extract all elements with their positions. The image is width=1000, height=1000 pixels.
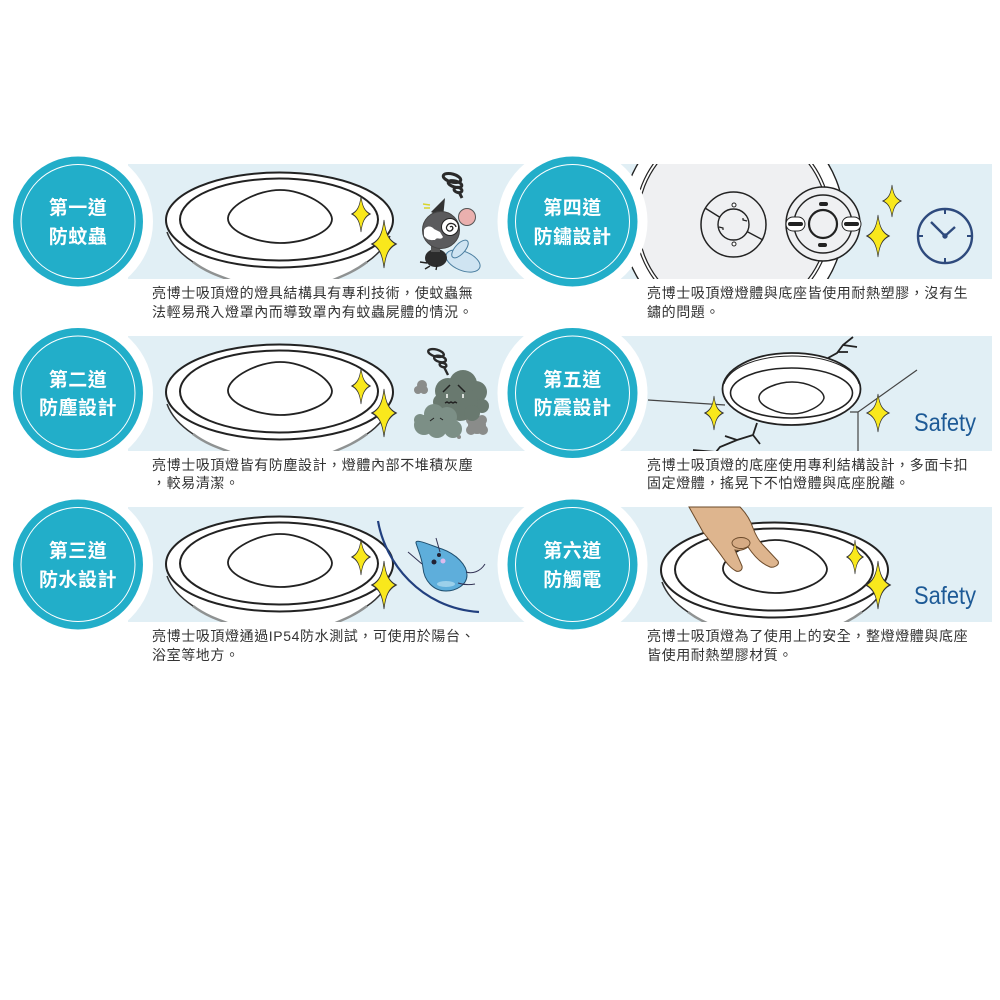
illustration: lamp row 1	[166, 172, 393, 292]
dizzy spiral	[427, 348, 448, 375]
badge: 第六道 防觸電: 防觸電	[543, 568, 602, 591]
badge: 第五道 防震設計: 防震設計	[533, 396, 612, 419]
text: safety row 2: Safety	[914, 409, 976, 437]
badge: 第五道 防震設計	[498, 318, 648, 468]
illustration: shaking lamp	[722, 353, 860, 425]
band: row 3	[128, 507, 992, 622]
icon: base plate right	[786, 187, 861, 261]
text: description 5: 固定燈體，搖晃下不怕燈體與底座脫離。	[647, 475, 910, 491]
text: description 5	[647, 457, 968, 491]
dizzy spiral	[442, 172, 463, 198]
badge: 第四道 防鏽設計	[498, 146, 648, 296]
text: description 2	[152, 457, 473, 491]
band: row 1	[128, 164, 992, 279]
text: description 3: 浴室等地方。	[152, 647, 240, 663]
text: description 3	[152, 628, 475, 663]
badge: 第五道 防震設計: 第五道	[543, 368, 602, 391]
icon: base plate left	[701, 192, 766, 257]
badge: 第一道 防蚊蟲: 第一道	[49, 196, 107, 219]
illustration: wall cracks	[693, 337, 857, 452]
badge: 第三道 防水設計: 防水設計	[39, 568, 117, 591]
mosquito ear	[458, 208, 476, 226]
badge: 第二道 防塵設計: 第二道	[49, 368, 107, 391]
badge: 第三道 防水設計: 第三道	[49, 539, 107, 562]
illustration: lamp row 3	[165, 516, 394, 622]
text: description 3: 亮博士吸頂燈通過IP54防水測試，可使用於陽台、	[152, 628, 475, 644]
icon: sparkles row 2 right	[705, 394, 889, 432]
small cloud	[414, 404, 462, 438]
text: description 1	[152, 285, 473, 320]
badge: 第一道 防蚊蟲	[3, 146, 153, 296]
face	[443, 385, 465, 403]
text: description 6: 皆使用耐熱塑膠材質。	[647, 647, 793, 663]
text: safety row 3: Safety	[914, 582, 976, 610]
icon: dizzy mosquito	[420, 172, 483, 277]
text: description 5: 亮博士吸頂燈的底座使用專利結構設計，多面卡扣	[647, 457, 968, 473]
icon: water drop character	[408, 538, 485, 591]
big cloud	[433, 370, 489, 421]
illustration: wall and ceiling lines	[648, 370, 917, 451]
text: description 4	[647, 285, 968, 320]
icon: sparkles row 2	[352, 368, 396, 437]
badge: 第二道 防塵設計: 防塵設計	[39, 396, 117, 419]
text: description 2: ，較易清潔。	[152, 475, 240, 491]
illustration: hand	[689, 507, 778, 571]
band: row 2	[128, 336, 992, 451]
badge: 第一道 防蚊蟲: 防蚊蟲	[49, 225, 107, 248]
badge: 第六道 防觸電	[498, 490, 648, 640]
icon: sparkles row 1	[352, 196, 396, 268]
mosquito body	[425, 249, 447, 267]
icon: sparkles row 3 right	[847, 540, 890, 609]
icon: dust cloud	[414, 348, 489, 439]
icon: water barrier curve	[378, 521, 479, 612]
badge: 第三道 防水設計	[3, 490, 153, 640]
text: description 1: 法輕易飛入燈罩內而導致罩內有蚊蟲屍體的情況。	[152, 304, 473, 320]
small puffs	[414, 380, 488, 439]
icon: sparkles row 1 right	[867, 185, 901, 257]
text: description 4: 鏽的問題。	[647, 304, 720, 320]
badge: 第四道 防鏽設計: 第四道	[543, 196, 602, 219]
badge: 第四道 防鏽設計: 防鏽設計	[533, 225, 612, 248]
text: description 6: 亮博士吸頂燈為了使用上的安全，整燈燈體與底座	[647, 628, 968, 644]
illustration: lamp being touched	[660, 522, 889, 622]
panel: ceiling disc	[631, 164, 840, 279]
icon: sparkles row 3	[352, 539, 396, 609]
text: description 2: 亮博士吸頂燈皆有防塵設計，燈體內部不堆積灰塵	[152, 457, 473, 473]
mosquito wings	[443, 245, 483, 277]
text: description 6	[647, 628, 968, 663]
text: description 1: 亮博士吸頂燈的燈具結構具有專利技術，使蚊蟲無	[152, 285, 473, 301]
badge: 第二道 防塵設計	[3, 318, 153, 468]
text: description 4: 亮博士吸頂燈燈體與底座皆使用耐熱塑膠，沒有生	[647, 285, 968, 301]
illustration: lamp row 2	[166, 344, 393, 464]
icon: clock	[918, 209, 972, 263]
badge: 第六道 防觸電: 第六道	[543, 539, 602, 562]
